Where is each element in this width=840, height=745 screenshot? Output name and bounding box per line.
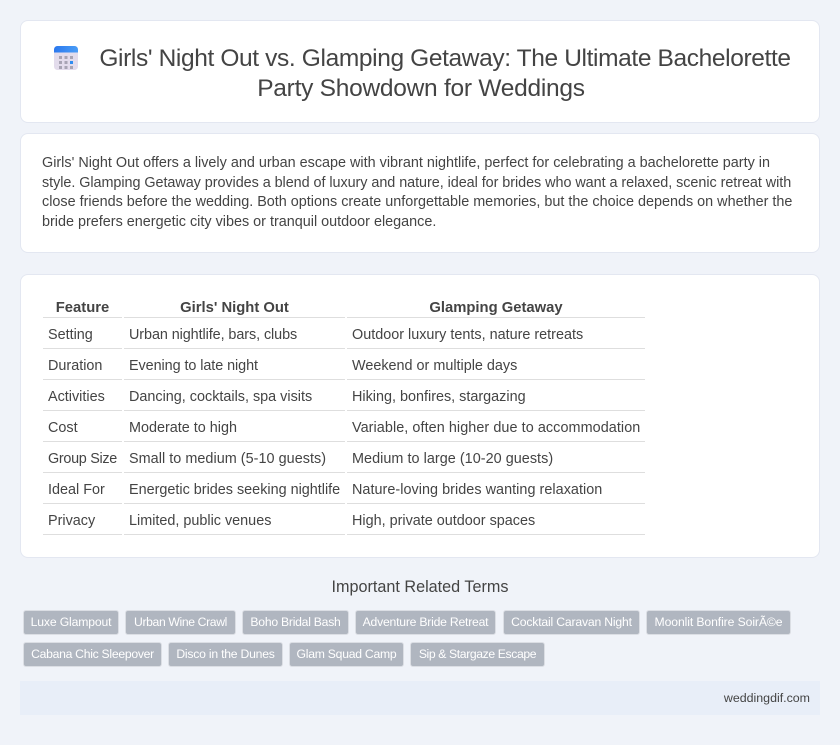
footer source text: weddingdif.com <box>724 691 810 705</box>
intro text: close friends before the wedding. Both options create unforgettable memories, but the choice depends on whether the <box>42 194 792 210</box>
comparison table: Activities <box>48 389 105 405</box>
comparison table: Limited, public venues <box>129 513 271 529</box>
footer bar <box>20 681 820 715</box>
intro text: bride prefers energetic city vibes or tranquil outdoor elegance. <box>42 214 436 230</box>
related terms tags <box>23 610 791 667</box>
comparison table: Weekend or multiple days <box>352 358 517 374</box>
related terms tags: Urban Wine Crawl <box>134 615 227 629</box>
comparison table: Cost <box>48 420 78 436</box>
intro text: Girls' Night Out offers a lively and urban escape with vibrant nightlife, perfect for celebrating a bachelorette party in <box>42 155 770 171</box>
related terms tags: Boho Bridal Bash <box>250 615 341 629</box>
comparison table: Girls' Night Out <box>180 300 289 316</box>
comparison table: High, private outdoor spaces <box>352 513 535 529</box>
intro text: style. Glamping Getaway provides a blend of luxury and nature, ideal for brides who want a relaxed, scenic retreat with <box>42 174 791 190</box>
title: Girls' Night Out vs. Glamping Getaway: The Ultimate Bachelorette <box>99 45 791 72</box>
related terms tags: Glam Squad Camp <box>297 647 396 661</box>
intro card <box>20 133 820 253</box>
comparison table: Hiking, bonfires, stargazing <box>352 389 526 405</box>
intro text <box>42 155 792 230</box>
comparison table: Energetic brides seeking nightlife <box>129 482 340 498</box>
comparison table: Ideal For <box>48 482 105 498</box>
related terms tags: Disco in the Dunes <box>176 647 275 661</box>
title <box>99 45 791 102</box>
header card <box>20 20 820 123</box>
comparison table: Medium to large (10-20 guests) <box>352 451 553 467</box>
related terms tags: Sip & Stargaze Escape <box>419 647 536 661</box>
comparison table: Duration <box>48 358 102 374</box>
comparison table: Urban nightlife, bars, clubs <box>129 327 297 343</box>
comparison table: Evening to late night <box>129 358 258 374</box>
comparison table: Glamping Getaway <box>429 300 563 316</box>
related terms tags: Luxe Glampout <box>31 615 111 629</box>
comparison table: Privacy <box>48 513 95 529</box>
title: Party Showdown for Weddings <box>257 74 585 102</box>
related terms tags: Cabana Chic Sleepover <box>31 647 154 661</box>
comparison table: Setting <box>48 327 93 343</box>
comparison table: Group Size <box>48 451 117 467</box>
related terms heading: Important Related Terms <box>332 578 508 596</box>
related terms tags: Adventure Bride Retreat <box>363 615 488 629</box>
comparison table: Moderate to high <box>129 420 237 436</box>
comparison table: Feature <box>56 300 109 316</box>
comparison table: Nature-loving brides wanting relaxation <box>352 482 602 498</box>
icon: calendar <box>54 46 78 70</box>
comparison table: Outdoor luxury tents, nature retreats <box>352 327 583 343</box>
comparison table: Small to medium (5-10 guests) <box>129 451 326 467</box>
related terms tags: Cocktail Caravan Night <box>511 615 632 629</box>
comparison table: Dancing, cocktails, spa visits <box>129 389 312 405</box>
related terms tags: Moonlit Bonfire SoirÃ©e <box>655 615 782 629</box>
comparison table: Variable, often higher due to accommodation <box>352 420 640 436</box>
comparison table card <box>20 274 820 558</box>
comparison table <box>43 300 645 535</box>
